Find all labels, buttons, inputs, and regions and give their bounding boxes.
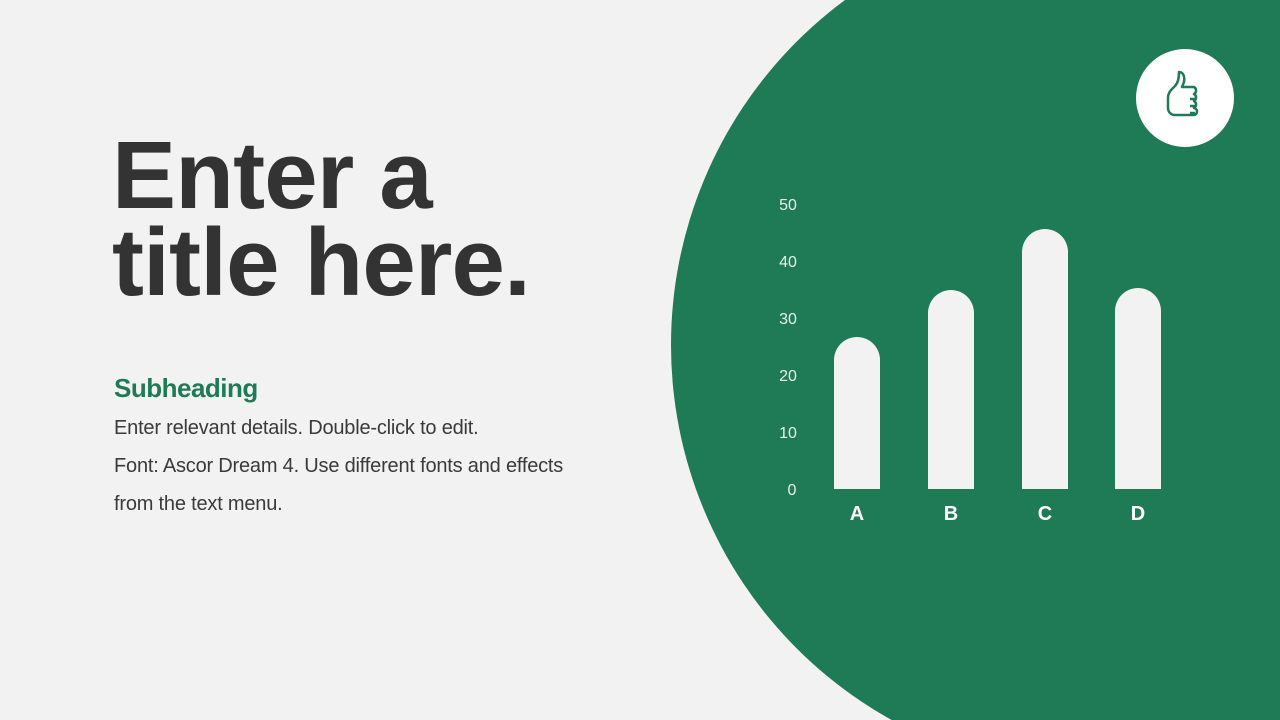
title: Enter a [112, 122, 432, 229]
bar chart: C [1038, 503, 1052, 525]
body text: Font: Ascor Dream 4. Use different fonts and effects [114, 455, 563, 477]
bar chart: 30 [779, 311, 797, 328]
bar chart: 0 [788, 482, 797, 499]
title [112, 122, 530, 316]
bar chart: 50 [779, 197, 797, 214]
bar chart: 40 [779, 254, 797, 271]
bar chart: B [944, 503, 958, 525]
body text: from the text menu. [114, 493, 282, 515]
bar chart: A [850, 503, 864, 525]
bar chart: D [1131, 503, 1145, 525]
body text: Enter relevant details. Double-click to edit. [114, 417, 479, 439]
body text [114, 417, 563, 515]
bar chart: 20 [779, 368, 797, 385]
bar chart: 10 [779, 425, 797, 442]
title: title here. [112, 209, 530, 316]
subheading: Subheading [114, 373, 258, 403]
